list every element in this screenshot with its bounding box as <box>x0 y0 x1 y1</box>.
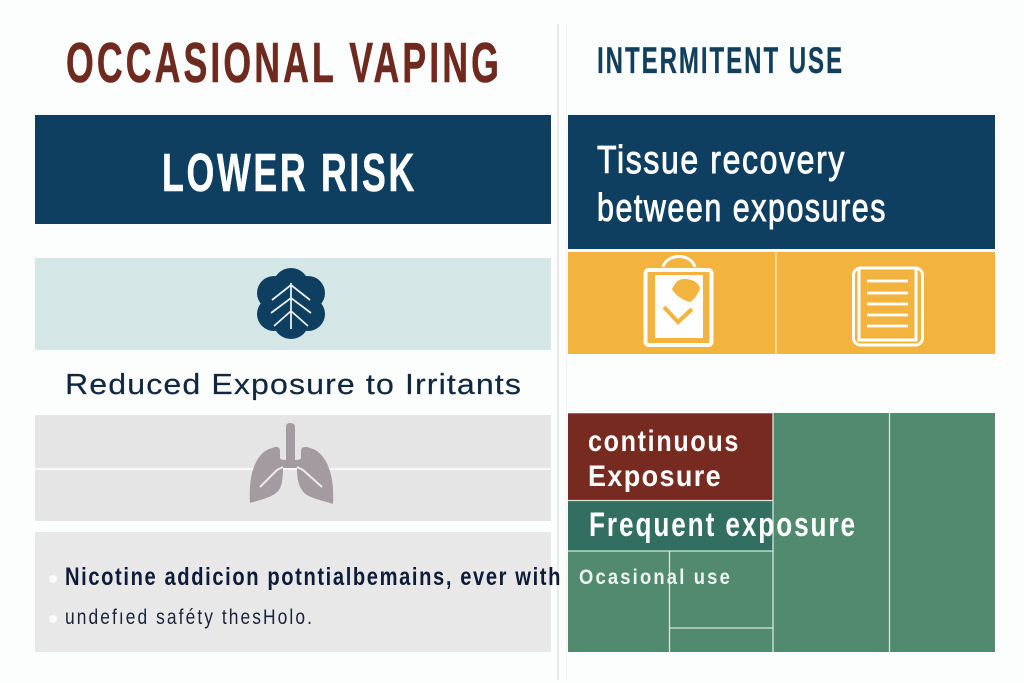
panel: tissue recovery banner: Tissue recovery <box>597 139 846 182</box>
panel: lower risk banner: LOWER RISK <box>162 143 417 203</box>
label: continuous exposure: Exposure <box>588 460 722 493</box>
panel: exposure treemap <box>568 413 995 652</box>
icon: clipboard <box>646 256 712 345</box>
label: continuous exposure <box>588 425 740 493</box>
panel: nicotine notes: undefıed saféty thesHolo. <box>65 606 314 629</box>
label: occasional use: Ocasional use <box>579 566 732 589</box>
icon: lungs <box>250 423 333 504</box>
panel: reduced exposure icon band <box>35 258 551 350</box>
label: frequent exposure: Frequent exposure <box>589 506 857 544</box>
icon: leaf cloud <box>257 268 325 339</box>
panel: nicotine notes <box>35 532 562 652</box>
title: occasional vaping: OCCASIONAL VAPING <box>66 31 502 95</box>
heading: intermittent use: INTERMITENT USE <box>597 40 844 81</box>
panel: tissue recovery banner <box>568 115 995 249</box>
panel: lungs band <box>35 415 551 521</box>
panel: nicotine notes: Nicotine addicion potntialbemains, ever with <box>65 563 562 591</box>
panel: tissue recovery banner: between exposures <box>597 187 887 230</box>
panel: lower risk banner <box>35 115 551 224</box>
icon: notebook <box>854 268 922 345</box>
panel: amber icon band <box>568 252 995 354</box>
text: reduced exposure to irritants: Reduced Exposure to Irritants <box>65 369 522 401</box>
label: continuous exposure: continuous <box>588 425 740 458</box>
